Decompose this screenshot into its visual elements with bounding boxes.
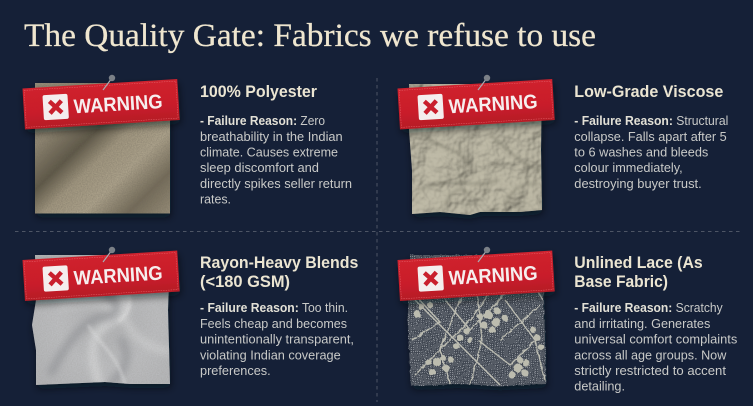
description: rates.: [200, 192, 231, 206]
description: - Failure Reason: Too thin.: [200, 301, 348, 315]
pin: [478, 247, 490, 262]
warning tag: [398, 79, 555, 129]
description: violating Indian coverage: [200, 348, 341, 362]
panel: Unlined Lace: [398, 247, 737, 394]
heading: 100% Polyester: [200, 83, 318, 101]
warning tag: WARNING: [73, 262, 163, 290]
description: to 6 washes and bleeds: [574, 146, 708, 160]
warning tag: WARNING: [448, 91, 538, 118]
heading: [200, 254, 358, 291]
description: directly spikes seller return: [200, 177, 352, 191]
description: [200, 301, 354, 378]
description: destroying buyer trust.: [574, 177, 702, 191]
heading: Low-Grade Viscose: [574, 83, 723, 101]
description: [574, 301, 737, 394]
fabric swatch: viscose: [405, 80, 545, 218]
heading: Unlined Lace (As: [574, 254, 703, 272]
description: breathability in the Indian: [200, 130, 343, 144]
pin: [478, 75, 490, 90]
description: - Failure Reason: Scratchy: [574, 301, 723, 315]
heading: [574, 254, 703, 291]
description: climate. Causes extreme: [200, 146, 338, 160]
pin: [103, 75, 115, 90]
fabric swatch: rayon: [30, 253, 172, 387]
description: - Failure Reason: Structural: [574, 114, 728, 128]
description: unintentionally transparent,: [200, 332, 354, 346]
description: universal comfort complaints: [574, 332, 737, 346]
description: [574, 114, 728, 191]
description: and irritating. Generates: [574, 317, 710, 331]
description: collapse. Falls apart after 5: [574, 130, 727, 144]
heading: Base Fabric): [574, 273, 668, 291]
description: preferences.: [200, 364, 271, 378]
fabric swatch: polyester: [35, 83, 170, 214]
title: The Quality Gate: Fabrics we refuse to use: [24, 18, 596, 54]
pin: [103, 247, 115, 262]
description: across all age groups. Now: [574, 348, 727, 362]
heading: (<180 GSM): [200, 273, 290, 291]
warning tag: WARNING: [73, 91, 163, 118]
description: detailing.: [574, 380, 625, 394]
description: sleep discomfort and: [200, 161, 319, 175]
heading: Rayon-Heavy Blends: [200, 254, 358, 272]
warning tag: WARNING: [448, 262, 538, 290]
panel: Low-Grade Viscose: [398, 75, 728, 218]
panel: Rayon-Heavy Blends: [22, 247, 358, 387]
fabric swatch: lace: [408, 255, 546, 386]
description: Feels cheap and becomes: [200, 317, 347, 331]
warning tag: [22, 79, 180, 129]
warning tag: [398, 251, 555, 301]
description: [200, 114, 352, 206]
panel: 100% Polyester: [22, 75, 352, 214]
description: strictly restricted to accent: [574, 364, 727, 378]
description: - Failure Reason: Zero: [200, 114, 325, 128]
warning tag: [22, 251, 180, 301]
description: colour immediately,: [574, 161, 683, 175]
